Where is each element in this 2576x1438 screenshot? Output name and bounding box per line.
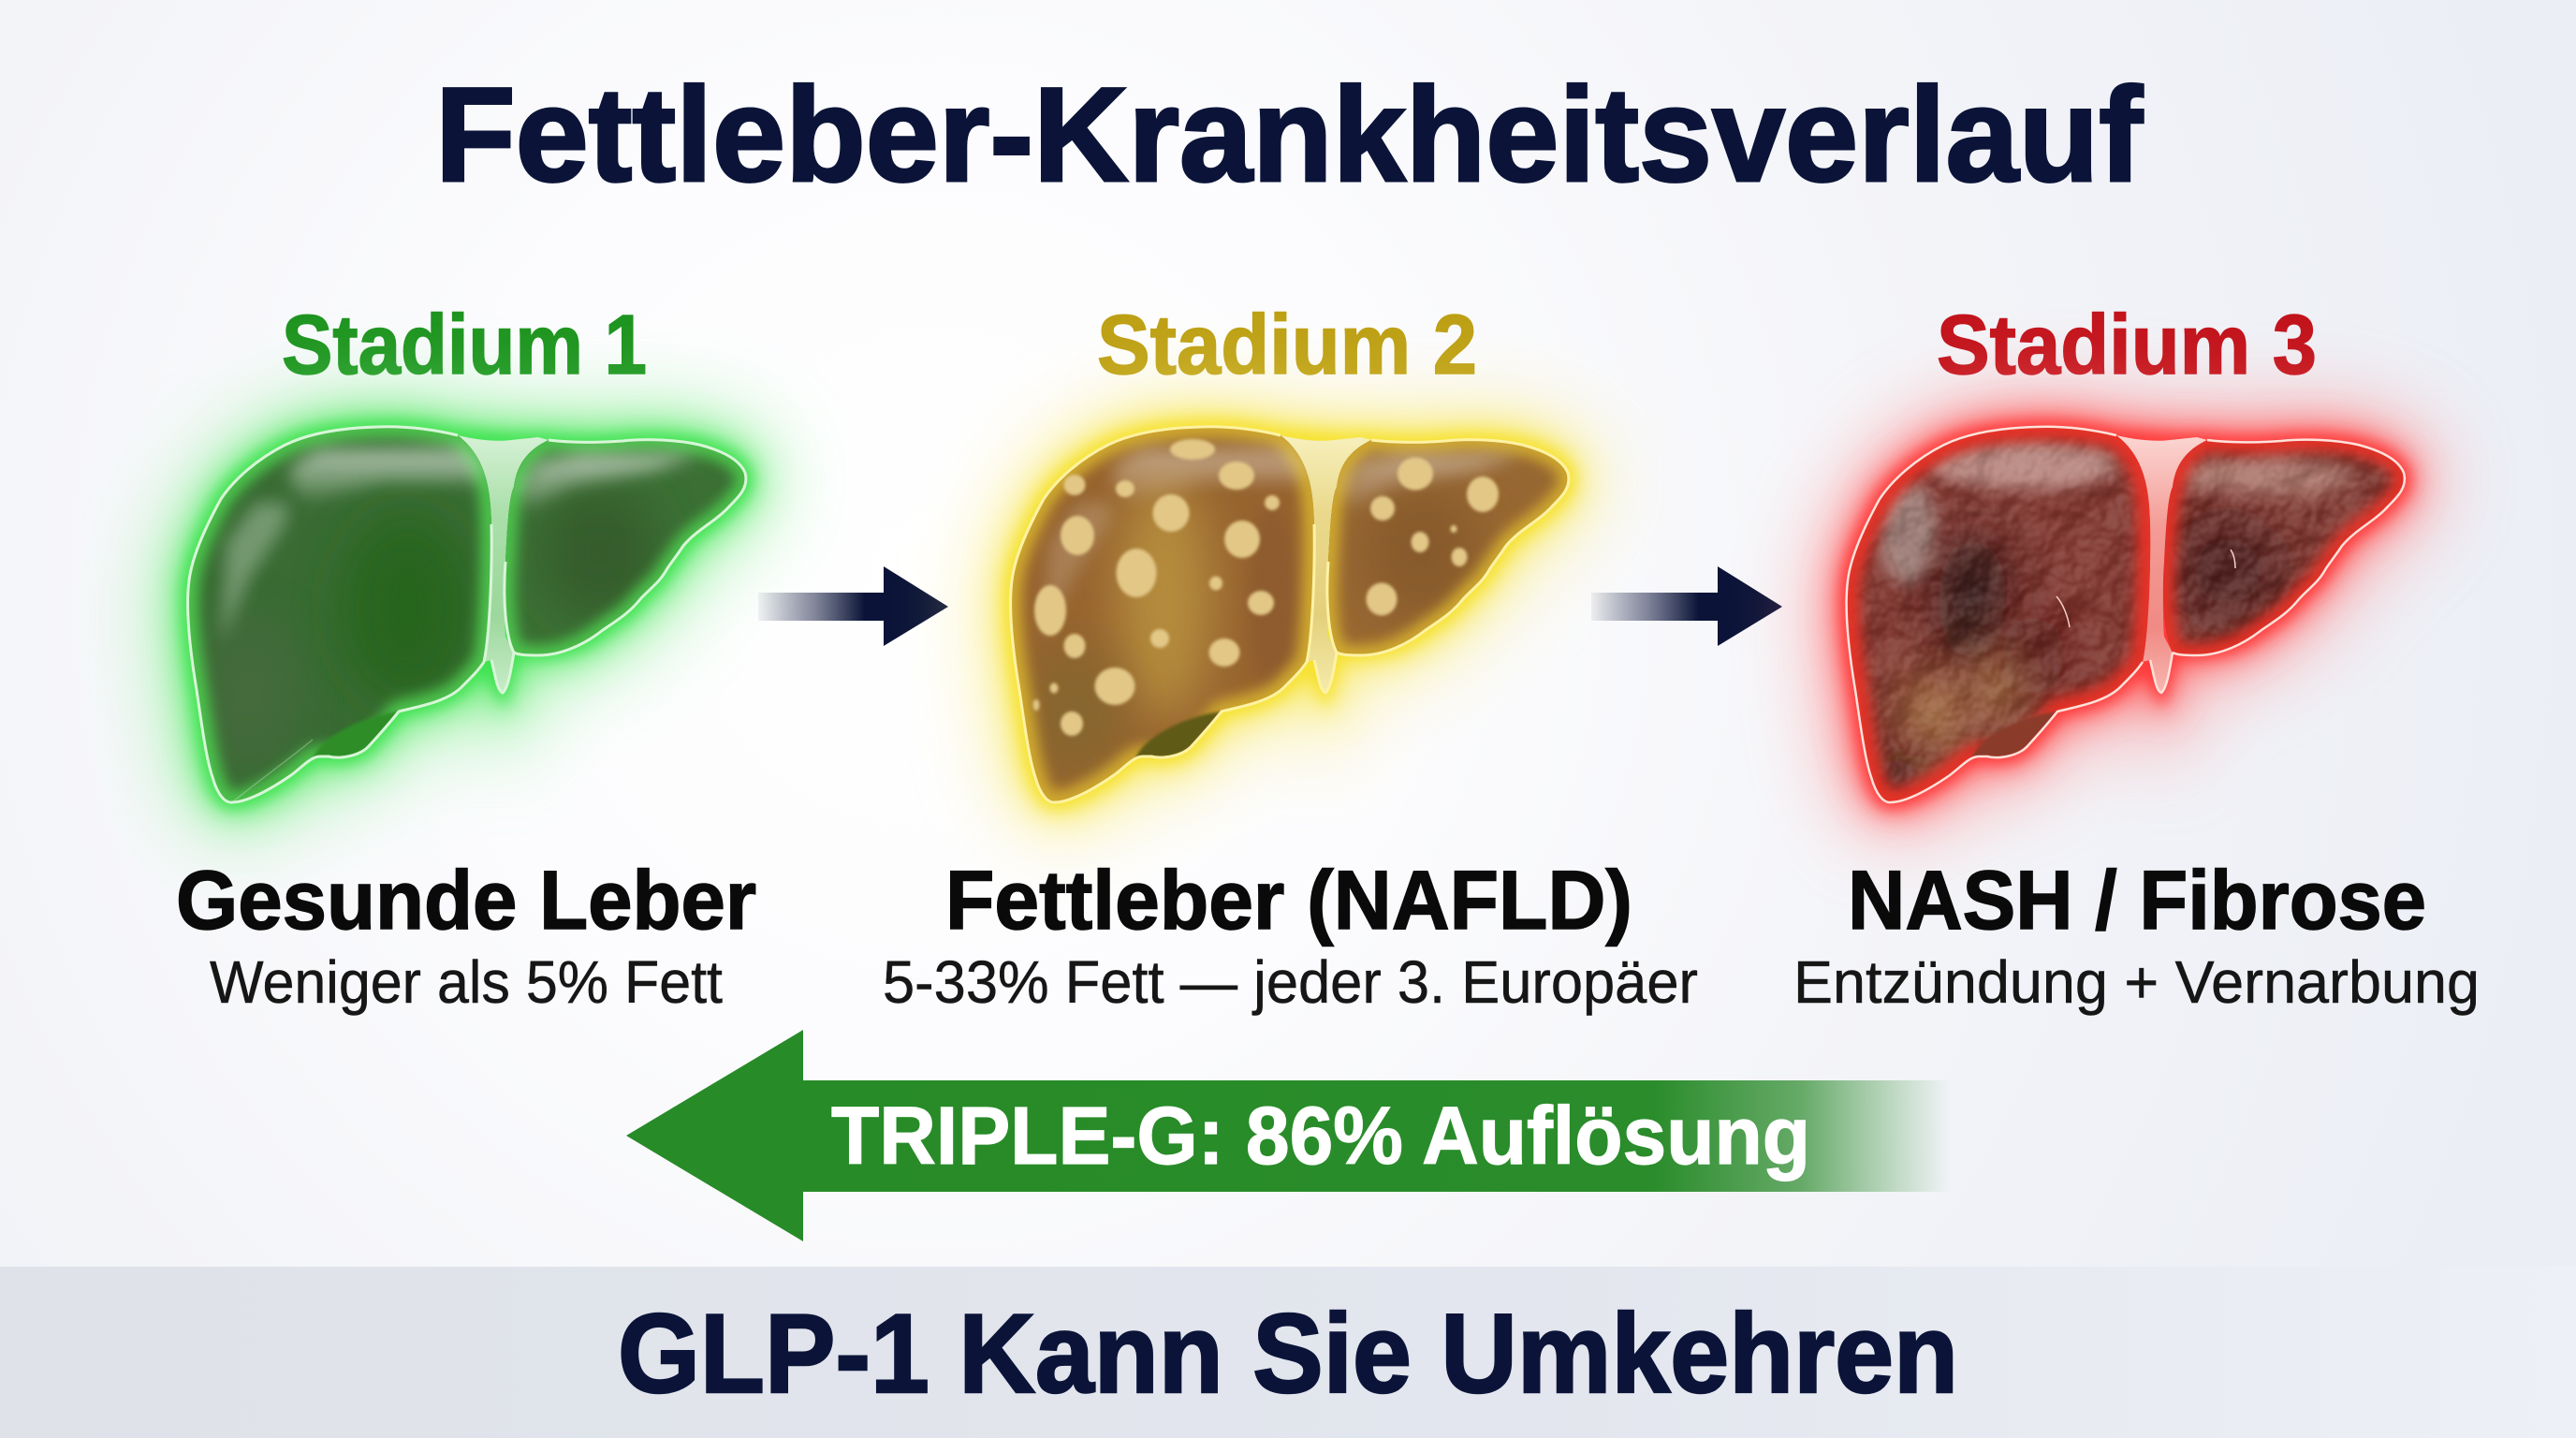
icon: fatty yellow liver: [991, 412, 1581, 814]
fat deposits: [1033, 439, 1499, 736]
label: NASH / Fibrose: NASH / Fibrose: [1848, 853, 2426, 946]
panel: Stadium 1: [168, 299, 758, 1016]
heading: Stadium 3: Stadium 3: [1937, 299, 2317, 392]
label: Fettleber (NAFLD): Fettleber (NAFLD): [945, 853, 1632, 946]
arrow label: TRIPLE-G: 86% Auflösung: [831, 1091, 1810, 1181]
heading: Stadium 1: Stadium 1: [282, 299, 647, 392]
reversal arrow: TRIPLE-G: [626, 1030, 1951, 1241]
sublabel: Entzündung + Vernarbung: Entzündung + Vernarbung: [1793, 948, 2480, 1016]
title: Fettleber-Krankheitsverlauf: [435, 61, 2143, 210]
arrow: stage 2 to stage 3: [1591, 566, 1782, 646]
sublabel: 5-33% Fett — jeder 3. Europäer: 5-33% Fett — jeder 3. Europäer: [883, 948, 1698, 1016]
icon: fibrotic red liver: [1827, 412, 2417, 814]
arrow: stage 1 to stage 2: [758, 566, 948, 646]
bottom banner: [0, 1267, 2576, 1438]
panel: Stadium 2: [883, 299, 1698, 1016]
heading: Stadium 2: Stadium 2: [1097, 299, 1477, 392]
label: Gesunde Leber: Gesunde Leber: [176, 853, 756, 946]
sublabel: Weniger als 5% Fett: Weniger als 5% Fett: [210, 948, 723, 1016]
icon: healthy green liver: [168, 412, 758, 814]
banner text: GLP-1 Kann Sie Umkehren: [618, 1291, 1958, 1416]
panel: Stadium 3: [1793, 299, 2480, 1016]
